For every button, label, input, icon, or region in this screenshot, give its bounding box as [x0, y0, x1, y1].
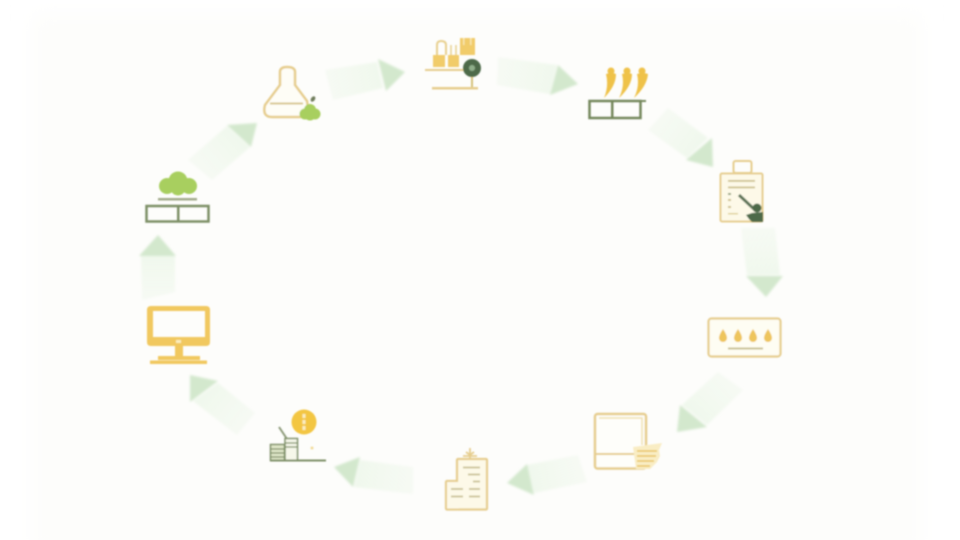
- icon: clipboard with tool: [720, 161, 763, 222]
- icon: bar stacks with info coin: [270, 410, 326, 462]
- arrow: tree to flask: [188, 123, 257, 180]
- arrow: tablet to building: [507, 455, 587, 495]
- arrow: clipboard to tray: [741, 228, 783, 297]
- icon: tray of four drops: [708, 318, 780, 356]
- arrow: computer to tree: [139, 235, 176, 300]
- icon: steam rising from box: [590, 68, 648, 118]
- arrow: steam to clipboard: [648, 108, 713, 167]
- arrow: factory to steam: [497, 57, 578, 95]
- icon: office building: [446, 448, 487, 510]
- arrow: tray to tablet: [677, 372, 743, 432]
- icon: green tree on box: [146, 172, 208, 222]
- icon: tablet with coins: [595, 414, 662, 469]
- arrow: building to stacks: [334, 457, 413, 494]
- arrow: stacks to computer: [190, 375, 255, 435]
- arrow: flask to factory: [325, 59, 405, 100]
- icon: flask with apple: [264, 67, 320, 120]
- icon: desktop computer: [147, 306, 210, 364]
- icon: factory conveyor: [425, 38, 481, 90]
